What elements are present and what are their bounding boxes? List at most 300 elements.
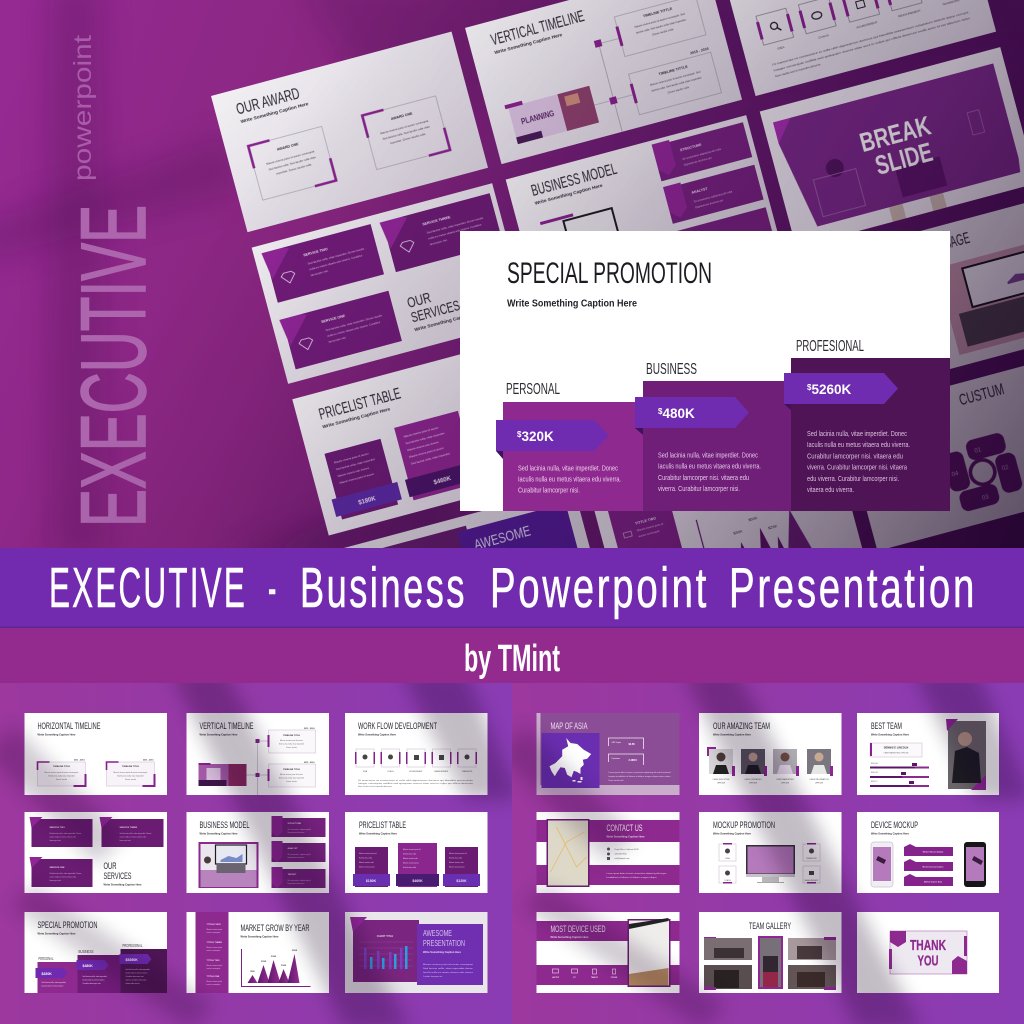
thumbnail: special promotion: SPECIAL PROMOTION [38, 920, 98, 930]
slide: pricelist table: Mauris viverra justo id auctor [403, 426, 439, 439]
right thumbnail sheet [498, 670, 1024, 1024]
thumbnail: vertical timeline [186, 713, 329, 795]
slide: our services: lamcorper nisi. [429, 238, 448, 246]
slide: market grow chart: Mauris viverra justo id [636, 521, 664, 532]
slide: pricelist table: Mauris viverra justo id auctor [409, 446, 444, 459]
slide: our award: Write Something Caption Here [240, 101, 310, 124]
thumbnail: our services: OUR [104, 861, 117, 871]
thumbnail: most device used: PHONE [611, 977, 618, 979]
thumbnail: business model: STRUCTURE [288, 823, 302, 825]
thumbnail: market grow by year: TITTLE ONE [206, 976, 220, 978]
thumbnail: our services: lamcorper nisi. [50, 840, 62, 842]
thumbnail: map of asia: tempor incididunt ut labore et dolore magna aliqua enim minim [608, 775, 671, 778]
slide: work flow: Ut maecenas mi consectetur et nulla nibh dignissimos ducimus qui blanditiis praesentium voluptatum deleniti atque corrupti. [772, 10, 970, 67]
thumbnail: work flow development: Nunc facilisi sed ut imperdiet dictumst. [358, 785, 392, 788]
thumbnail: mockup promotion: IDEA [725, 857, 730, 860]
slide: custom pinwheel: 01 [974, 446, 983, 455]
thumbnail: market grow by year: auctor consequat [206, 949, 221, 952]
thumbnail: our services: iaculis nulla eu metus vitaera edu [120, 836, 146, 838]
thumbnail: awesome presentation: Write Something Caption Here [423, 950, 462, 954]
slide: device usage photo [920, 203, 1024, 369]
slide: our services: nulla eu metus vitaera edu viverra. Curabitur [309, 253, 363, 271]
slide: business model: Write Something Caption Here [534, 183, 604, 206]
thumbnail: best team: CHIEF MARKETING OFFICER [884, 752, 909, 754]
slide: pricelist table: Mauris viverra justo id auctor [339, 472, 375, 485]
thumbnail: pricelist table: Sed lacinia nulla [403, 867, 416, 869]
slide: market grow chart: auctor consequat [638, 529, 660, 538]
thumbnail: business model [186, 812, 329, 893]
thumbnail: our services: Sed lacinia nulla, vitae imperdiet. Donec [50, 832, 82, 835]
tier: business: Iaculis nulla eu metus vitaera edu viverra. [658, 464, 761, 470]
slide: our award: Sed lacinia nulla. Sed iaculis nulla vitae [268, 155, 317, 172]
slide: business model: BUSINESS MODEL [530, 161, 619, 200]
thumbnail: work flow development: Write Something Caption Here [358, 732, 397, 736]
thumbnail: our amazing team: CHIEF INFORMATION [809, 778, 829, 781]
vertical wordmark: powerpoint: powerpoint [69, 35, 97, 181]
slide: business model: Dignissimos ducimus qui [695, 198, 724, 209]
thumbnail: most device used [536, 912, 680, 993]
thumbnail: best team [857, 713, 999, 795]
thumbnail: horizontal timeline [24, 713, 167, 795]
thumbnail: pricelist table: Mauris viverra justo id [359, 852, 376, 855]
thumbnail: thank you: THANK [910, 937, 946, 954]
thumbnail: pricelist table: Mauris viverra justo [403, 862, 419, 864]
thumbnail: horizontal timeline: Write Something Caption Here [38, 732, 76, 736]
thumbnail: business model: TARGET [288, 873, 297, 876]
slide: our services: lamcorper nisi. [328, 335, 347, 344]
thumbnail: special promotion: PROFESIONAL [122, 943, 143, 948]
thumbnail: contact us: Purple Place, California 90210 [614, 849, 639, 851]
tilted slide wall [183, 0, 1024, 548]
thumbnail: awesome presentation: Iaculis nulla eu metus vitaera edu viverra [423, 971, 473, 974]
tier: profesional: PROFESIONAL [796, 338, 864, 355]
slide: custom pinwheel: 02 [1001, 464, 1010, 473]
thumbnail: device mockup: Market Volume Data [924, 880, 943, 884]
tier: business: 480K [662, 406, 695, 421]
author text: by TMint [464, 638, 560, 680]
slide: business model: STRUCTURE [680, 143, 703, 152]
thumbnail: pricelist table: Mauris viverra justo id [403, 848, 420, 851]
thumbnail: our services: Write Something Caption Here [104, 882, 142, 886]
thumbnail: special promotion: Sed lacinia nulla, vitae imperdiet. [42, 981, 67, 984]
slide: pricelist table: $460K [433, 476, 453, 486]
slide: business model: Dignissimos ducimus qui [683, 156, 712, 167]
tier: personal: Sed lacinia nulla, vitae imperdiet. Donec [518, 466, 618, 472]
thumbnail: horizontal timeline: 2015 - 2016 [143, 760, 154, 762]
thumbnail: business model: Dignissimos ducimus [288, 857, 304, 859]
slide: our award: imperdiet. Donec iaculis nulla [390, 132, 426, 145]
thumbnail: business model: Write Something Caption Here [200, 832, 238, 836]
thumbnail: work flow development: Ut maecenas mi consectetur et nulla nibh dignissimos ducimus qui blanditiis praesentium [358, 779, 473, 782]
slide: our award [211, 32, 488, 232]
thumbnail: market grow by year [186, 912, 329, 993]
thumbnail: contact us [536, 812, 680, 893]
thumbnail: awesome presentation: AWESOME [423, 928, 452, 938]
thumbnail: business model: Dignissimos ducimus [288, 883, 304, 885]
thumbnail: best team: DENNIS E LINCOLN [884, 746, 908, 750]
thumbnail: our services: Sed lacinia nulla, vitae imperdiet. Donec [120, 832, 152, 835]
slide: business model: Sit consectetur adipiscing elit nulla [693, 189, 733, 204]
thumbnail: our amazing team: OFFICER [781, 782, 790, 784]
slide: our award: Mauris viverra justo id auctor consequat. [266, 149, 316, 166]
thumbnail: our services: SERVICE THREE [120, 827, 138, 829]
tier: business: viverra. Curabitur lamcorper nisi. [658, 486, 740, 493]
thumbnail: our services [24, 812, 167, 893]
thumbnail: market grow by year: TITTLE THREE [206, 942, 222, 944]
thumbnail: device mockup: Market Volume Analyst [923, 850, 944, 854]
slide: our services: Sed lacinia nulla, vitae imperdiet. Donec iaculis [307, 247, 365, 266]
slide: our services: Write Something Caption Here [414, 309, 483, 332]
slide: device usage photo: DEVICE USAGE [900, 230, 972, 264]
thumbnail: pricelist table: Sed lacinia nulla [359, 858, 372, 860]
main title: Business [300, 556, 467, 620]
thumbnail: our services: Sed lacinia nulla, vitae imperdiet. Donec [50, 872, 82, 875]
thumbnail: pricelist table: Sed lacinia nulla [403, 854, 416, 856]
thumbnail: best team: BEST TEAM [871, 721, 902, 731]
thumbnail: most device used: PC [573, 977, 576, 979]
hero background [0, 0, 1024, 560]
slide: pricelist table: Sed lacinia nulla, vitae imperdiet [410, 451, 450, 466]
tier: personal: $ [517, 430, 522, 439]
slide: vertical timeline: lacinia nulla. Sed iaculis nulla vitae imperdiet. [636, 17, 687, 35]
tier: profesional: vitaera edu viverra. [807, 487, 854, 494]
slide: our services: Sed lacinia nulla, vitae imperdiet. Donec iaculis [325, 313, 383, 332]
thumbnail: map of asia: GNP Capita [612, 741, 621, 744]
thumbnail: device mockup: Write Something Caption Here [871, 832, 910, 836]
thumbnail: work flow development: COACH [387, 770, 394, 773]
slide: market grow chart: TITTLE TWO [635, 516, 657, 526]
thumbnail: special promotion: Iaculis nulla eu metus vitaera [42, 984, 63, 988]
thumbnail: special promotion [24, 912, 167, 993]
slide: vertical timeline: PLANNING [520, 109, 555, 126]
thumbnail: business model: Sit consectetur adipiscing elit [288, 853, 311, 856]
author band [0, 628, 1024, 683]
thumbnail: our amazing team: Write Something Caption Here [713, 732, 752, 736]
thumbnail: vertical timeline: TIMELINE TITLE [283, 735, 300, 737]
thumbnail: pricelist table: Mauris viverra justo [449, 866, 465, 868]
thumbnail: vertical timeline: Sed lacinia nulla vitae imperdiet [279, 742, 305, 746]
thumbnail: pricelist table: PRICELIST TABLE [359, 820, 406, 830]
caption: Write Something Caption Here [507, 298, 637, 310]
slide: vertical timeline [465, 0, 742, 164]
thumbnail: work flow development: IDEA [363, 770, 368, 773]
slide: our services [252, 183, 529, 384]
slide: pricelist table [292, 354, 460, 536]
main title [49, 556, 977, 620]
thumbnail: work flow development [345, 713, 488, 795]
slide: awesome presentation: AWESOME [472, 522, 533, 554]
thumbnail: special promotion: Sed lacinia nulla, vitae imperdiet. [126, 968, 151, 971]
slide: market grow chart: $25K [767, 523, 778, 530]
thumbnail: horizontal timeline: TIMELINE TITLE [122, 766, 139, 768]
slide: work flow: Integer consequat mollitia sed quisquam viverra vitae sunt in culpa qui officia deserunt mollit anim id est laborum dolor. [773, 16, 971, 72]
thumbnail: contact us: mail@domain.com [614, 858, 630, 860]
tier: profesional: viverra. Curabitur lamcorper nisi. vitaera [807, 464, 907, 472]
thumbnail: thank you [857, 912, 999, 993]
thumbnail: special promotion: PERSONAL [38, 956, 54, 961]
thumbnail: market grow by year: auctor consequat [206, 983, 221, 986]
thumbnail: our amazing team: OFFICER [815, 782, 824, 784]
slide: work flow: MEASUREMENT [898, 8, 921, 18]
thumbnail: map of asia: Donec iaculis nulla [608, 780, 623, 782]
slide: business model [506, 115, 778, 231]
thumbnail: horizontal timeline: TIMELINE TITLE [53, 766, 70, 768]
thumbnail: market grow by year: Mauris viverra justo [206, 964, 222, 967]
thumbnail: special promotion: Write Something Caption Here [38, 932, 76, 936]
thumbnail: mockup promotion [699, 812, 842, 893]
slide: our award: AWARD ONE [277, 142, 300, 152]
thumbnail: special promotion: vitaera edu viverra. [126, 982, 140, 985]
tier: profesional: 5260K [811, 382, 851, 397]
thumbnail: market grow by year: $80K [250, 971, 255, 973]
thumbnail: contact us: Write Something Caption Here [606, 834, 645, 838]
shading over slide wall [183, 0, 1024, 548]
slide: vertical timeline: Donec iaculis nulla [652, 27, 674, 37]
thumbnail: pricelist table: $460K [412, 879, 423, 883]
thumbnail: mockup promotion: TEAMWORK [806, 857, 818, 860]
thumbnail: horizontal timeline: Donec iaculis [56, 779, 67, 781]
thumbnail: our services: iaculis nulla eu metus vitaera edu [50, 836, 76, 838]
tier: profesional: edu viverra. Curabitur lamcorper nisi. [807, 476, 899, 483]
thumbnail: pricelist table: Mauris viverra justo id [449, 852, 466, 855]
thumbnail: our amazing team: CHIEF EXECUTIVE [713, 779, 730, 781]
thumbnail: pricelist table: Mauris viverra edu [403, 858, 418, 860]
thumbnail: map of asia: MAP OF ASIA [550, 721, 588, 731]
thumbnail: pricelist table: Sed lacinia nulla [449, 858, 462, 860]
main slide: special promotion [460, 231, 950, 511]
thumbnail: contact us: 1234 567 8910 [614, 854, 626, 856]
thumbnail: horizontal timeline: HORIZONTAL TIMELINE [38, 721, 100, 731]
slide: custom pinwheel [866, 366, 1024, 548]
slide: pricelist table: PRICELIST TABLE [317, 385, 403, 424]
thumbnail: special promotion: $320K [42, 972, 52, 976]
tier: business: $ [658, 407, 663, 416]
thumbnail: map of asia: Population [612, 757, 620, 760]
tier: profesional [784, 338, 950, 511]
slide: pricelist table: Mauris viverra edu viverra [407, 440, 439, 452]
tier: personal: Iaculis nulla eu metus vitaera edu viverra. [518, 476, 621, 484]
slide: our award: Mauris viverra justo id auctor consequat. [380, 118, 430, 135]
thumbnail: special promotion: viverra. Curabitur lamcorper [126, 978, 147, 982]
thumbnail: special promotion: $480K [82, 964, 93, 968]
thumbnail: best team: Write Something Caption Here [871, 732, 910, 736]
thumbnail: awesome presentation: Curabitur lamcorper nisi. [423, 975, 443, 978]
thumbnail: our amazing team: OFFICER [749, 782, 758, 784]
left sheet shadow bands [0, 670, 520, 1024]
slide: our award: Sed lacinia nulla. Sed iaculis nulla vitae [382, 124, 431, 141]
thumbnail: team gallery [699, 912, 842, 993]
slide: our services: lamcorper nisi. [310, 269, 329, 277]
slide: vertical timeline: Mauris viverra justo id auctor consequat. Sed [650, 69, 701, 87]
slide: pricelist table: Mauris viverra justo id auctor [334, 451, 369, 465]
slide: pricelist table: Write Something Caption Here [322, 406, 391, 429]
thumbnail: business model: Sit consectetur adipiscing elit [288, 879, 311, 882]
thumbnail: vertical timeline: Sed lacinia nulla vitae imperdiet [279, 776, 305, 780]
right sheet shadow bands [498, 670, 1024, 1024]
thumbnail: vertical timeline: 2012 - 2014 [304, 727, 315, 730]
thumbnail: awesome presentation: PRESENTATION [423, 938, 465, 948]
main title: Powerpoint [490, 556, 709, 620]
thumbnail: market grow by year: Mauris viverra justo [206, 980, 222, 983]
tier: personal: PERSONAL [506, 381, 560, 398]
slide: break slide: SLIDE [872, 137, 936, 181]
thumbnail: map of asia: 3.46B K [628, 759, 638, 762]
slide: our services: SERVICES [409, 297, 462, 326]
slide: pricelist table: Sed lacinia nulla, vitae imperdiet [335, 457, 375, 471]
thumbnail: contact us: CONTACT US [606, 823, 642, 833]
thumbnail: pricelist table: Write Something Caption Here [359, 832, 398, 836]
thumbnail: our amazing team: CHIEF OPERATING [744, 778, 762, 781]
thumbnail: our amazing team: OFFICER [717, 782, 726, 784]
thumbnail: special promotion: Iaculis nulla eu metus vitaera [126, 972, 147, 974]
thumbnail: horizontal timeline: Sed lacinia nulla vitae imperdiet [48, 774, 75, 778]
slide: custom pinwheel: 03 [981, 493, 990, 502]
thumbnail: work flow development: Integer consequat mollitia sed quisquam viverra vitae sunt in culpa qui officia deserunt [358, 782, 474, 785]
thumbnail: special promotion: Iaculis nulla eu metus vitaera [82, 978, 104, 982]
slide: work flow: Nunc facilisi sed ut imperdiet dictumst. [775, 62, 822, 78]
thumbnail: market grow by year: Mauris viverra justo [206, 928, 222, 931]
slide: pricelist table: $180K [358, 496, 377, 507]
tier: business [635, 361, 791, 511]
title band [0, 548, 1024, 628]
thumbnail: market grow by year: auctor consequat [206, 967, 221, 970]
thumbnail: map of asia: $3.5K [628, 743, 635, 746]
slide: our services: OUR [405, 289, 433, 312]
thumbnail: special promotion: Sed lacinia nulla, vitae imperdiet. [82, 975, 108, 978]
slide: awesome presentation [344, 511, 590, 548]
slide: work flow [719, 0, 996, 96]
thumbnail: market grow by year: auctor consequat [206, 931, 221, 934]
thumbnail: vertical timeline: Donec iaculis [286, 747, 297, 749]
slide: vertical timeline: TIMELINE TITTLE [658, 65, 689, 76]
slide: vertical timeline: Write Something Caption Here [494, 32, 563, 55]
thumbnail: pricelist table: $120K [456, 879, 467, 883]
tier: personal [496, 381, 643, 511]
tier: business: BUSINESS [646, 361, 697, 378]
thumbnail: market grow by year: $160K [271, 956, 277, 958]
left thumbnail sheet [0, 670, 520, 1024]
thumbnail: our services: SERVICE TWO [50, 827, 65, 829]
thumbnail: business model: BUSINESS MODEL [200, 820, 250, 830]
slide: our services: nulla eu metus vitaera edu viverra. Curabitur [428, 222, 482, 241]
thumbnail: horizontal timeline: Mauris viverra justo id auctor consequat. [45, 771, 79, 774]
thumbnail: contact us: Incididunt ut labore et dolore magna aliqua [606, 876, 656, 879]
thumbnail: contact us: Lorem ipsum dolor sit amet consectetur adipiscing elit tempor [606, 872, 667, 875]
thumbnail: pricelist table: Mauris viverra justo [359, 866, 375, 868]
slide: vertical timeline: lacinia nulla. Sed iaculis nulla vitae imperdiet. [651, 75, 703, 93]
thumbnail: our amazing team: CHIEF MARKETING [776, 778, 794, 781]
thumbnail: mockup promotion: COACH [724, 879, 731, 882]
thumbnail: team gallery: TEAM GALLERY [749, 921, 791, 931]
thumbnail: vertical timeline: Mauris viverra justo id auctor. [280, 773, 304, 776]
thumbnail: work flow development: ACHIEVEMENT [410, 770, 423, 773]
thumbnail: vertical timeline: VERTICAL TIMELINE [200, 721, 254, 731]
thumbnail: horizontal timeline: Mauris viverra justo id auctor consequat. [114, 771, 148, 774]
thumbnail: awesome presentation [345, 912, 488, 993]
thumbnail: our services: SERVICE ONE [50, 867, 65, 869]
slide: break slide [760, 47, 1024, 248]
slide: our services: SERVICE THREE [422, 215, 452, 227]
slide: break slide: BREAK [857, 110, 934, 158]
slide: pricelist table: Mauris viverra edu viverra [337, 466, 370, 478]
slide: our award: imperdiet. Donec iaculis nulla [276, 162, 312, 176]
slide: our services: SERVICE ONE [321, 314, 346, 324]
thumbnail: work flow development: TEAMWORK [462, 770, 473, 773]
thumbnail: pricelist table: $180K [366, 879, 377, 883]
slide: work flow: IDEA [777, 45, 785, 51]
thumbnail: market grow by year: TITTLE FOUR [206, 924, 221, 926]
thumbnail: work flow development: WORK FLOW DEVELOPMENT [358, 721, 437, 731]
tier: business: Sed lacinia nulla, vitae imperdiet. Donec [658, 452, 758, 460]
thumbnail: most device used: Write Something Caption Here [550, 935, 589, 939]
thumbnail: special promotion: Curabitur lamcorper nisi. [126, 975, 144, 978]
thumbnail: vertical timeline: 2015 - 2016 [304, 762, 315, 764]
thumbnail: special promotion: Curabitur lamcorper nisi. [82, 982, 101, 985]
tier: business: Curabitur lamcorper nisi. vitaera edu [658, 475, 749, 482]
slide: our award: AWARD ONE [391, 111, 414, 121]
slide: business model: ANALYST [691, 187, 709, 195]
tier: profesional: $ [807, 383, 812, 392]
thumbnail: pricelist table [345, 812, 488, 893]
main title: EXECUTIVE [49, 556, 247, 620]
thumbnail: horizontal timeline: Sed lacinia nulla vitae imperdiet [117, 774, 144, 778]
thumbnail: mockup promotion: MOCKUP PROMOTION [713, 820, 775, 830]
slide: market grow chart: $30K [733, 528, 743, 536]
thumbnail: mockup promotion: Write Something Caption Here [713, 832, 752, 836]
main title: - [268, 556, 278, 620]
thumbnail: horizontal timeline: 2012 - 2014 [74, 758, 85, 762]
slide: market grow chart [594, 511, 862, 548]
thumbnail: our services: lamcorper nisi. [120, 840, 132, 842]
thumbnail: work flow development: MEASUREMENT [435, 770, 449, 773]
slide: work flow: COACH [818, 33, 829, 40]
thumbnail: market grow by year: $100K [281, 965, 287, 967]
thumbnail: map of asia: Lorem ipsum dolor sit amet, consectetur adipiscing elit sed do eiusmod [608, 771, 670, 774]
thumbnail: special promotion: BUSINESS [78, 949, 94, 954]
thumbnail: market grow by year: $120K [261, 961, 267, 963]
slide: market grow chart: $60K [748, 515, 758, 522]
slide: pricelist table: Sed lacinia nulla, vitae imperdiet [405, 431, 445, 445]
slide: vertical timeline: 2015 - 2016 [690, 47, 709, 55]
slide: work flow: ACHIEVEMENT [856, 20, 878, 30]
thumbnail: our services: iaculis nulla eu metus vitaera edu [50, 876, 76, 878]
thumbnail: most device used: TABLET [591, 976, 599, 979]
thumbnail: our amazing team: OUR AMAZING TEAM [713, 721, 770, 731]
thumbnail: mockup promotion: MEASUREMENT [805, 879, 819, 882]
thumbnail: business model: ANALYST [288, 847, 298, 850]
thumbnail: pricelist table: Mauris viverra edu [449, 862, 464, 864]
thumbnail: market grow by year: MARKET GROW BY YEAR [240, 923, 310, 933]
thumbnail: awesome presentation: Sed lacinia nulla, vitae imperdiet donec [423, 967, 473, 970]
slide: our services: SERVICE TWO [303, 247, 328, 257]
tier: personal: Curabitur lamcorper nisi. [518, 488, 580, 494]
thumbnail: vertical timeline: Write Something Caption Here [200, 732, 238, 736]
thumbnail: our amazing team [699, 713, 842, 795]
thumbnail: market grow by year: Write Something Caption Here [240, 934, 279, 938]
thumbnail: market grow by year: $200K [292, 950, 298, 952]
thumbnail: vertical timeline: Mauris viverra justo id auctor. [280, 739, 304, 742]
tier: profesional: Iaculis nulla eu metus vitaera edu viverra. [807, 442, 910, 449]
thumbnail: vertical timeline: TIMELINE TITLE [283, 769, 300, 771]
thumbnail: most device used: LAPTOP [552, 976, 560, 979]
thumbnail: market grow by year: TITTLE TWO [206, 960, 220, 962]
slide: our services: nulla eu metus vitaera edu viverra. Curabitur [327, 320, 381, 338]
slide: our award: OUR AWARD [234, 85, 302, 119]
thumbnail: awesome presentation: Mauris viverra justo id auctor consequat [423, 963, 474, 966]
slide: vertical timeline: TIMELINE TITTLE [643, 7, 673, 18]
tier: personal: 320K [521, 429, 554, 444]
slide: custom pinwheel: 04 [951, 470, 960, 478]
